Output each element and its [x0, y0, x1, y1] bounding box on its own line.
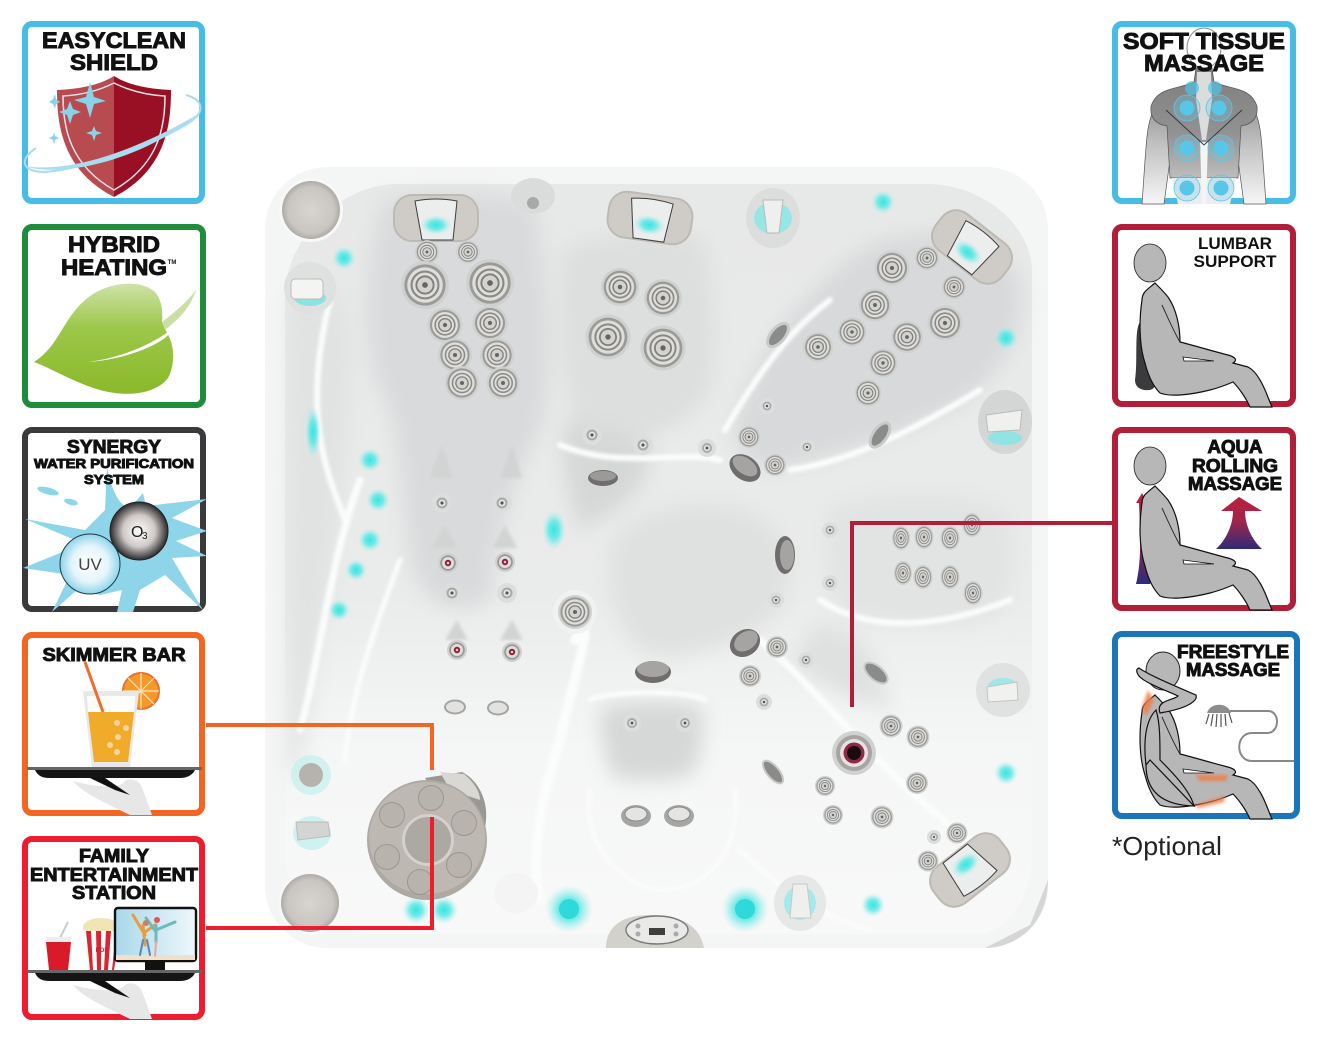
heading: Skimmer Bar: SKIMMER BAR: [42, 645, 186, 665]
panel: Skimmer Bar: [25, 635, 202, 815]
heading: Soft Tissue Massage: [1123, 28, 1285, 76]
icon: tablet with dancers: [115, 908, 196, 971]
panel: EasyClean Shield: [24, 24, 202, 201]
connector: family entertainment station: [206, 817, 432, 928]
jets: lower right seat: [724, 623, 968, 872]
heading: Family Entertainment Station: [30, 846, 198, 903]
icon: green leaf: [34, 284, 196, 394]
icon: shield with sparkles: [24, 76, 200, 197]
heading: Soft Tissue Massage: MASSAGE: [1144, 50, 1264, 76]
rolling massage jet: [832, 731, 876, 775]
heading: Lumbar Support: SUPPORT: [1194, 252, 1277, 271]
heading: Synergy: [34, 437, 194, 487]
icon: ozone bubble: [110, 502, 168, 560]
icon: droplets: [36, 485, 79, 507]
heading: Aqua Rolling Massage: AQUA: [1208, 437, 1262, 457]
heading: Aqua Rolling Massage: MASSAGE: [1188, 474, 1282, 494]
heading: Aqua Rolling Massage: ROLLING: [1192, 456, 1278, 476]
icon: orange slice: [123, 673, 159, 709]
heading: Family Entertainment Station: FAMILY: [79, 846, 149, 866]
illustration: muscular back with massage points: [1142, 28, 1266, 204]
heading: Aqua Rolling Massage: [1188, 437, 1282, 494]
icon: popcorn: POP: [96, 948, 108, 954]
panel: Family Entertainment Station: [25, 839, 202, 1019]
panel: Aqua Rolling Massage: [1115, 430, 1293, 610]
cup holder lights: [545, 885, 769, 933]
icon: figure reaching back with massage zones: [1137, 652, 1272, 819]
panel: Hybrid Heating: [25, 227, 203, 405]
icon: tray and hand: [27, 970, 202, 1019]
headrest pillows: [393, 188, 1021, 915]
icon: soda cup: [46, 922, 71, 970]
arrow: back rolling gradient: [1136, 493, 1154, 584]
cyan lights: [305, 190, 1018, 924]
tub shell: [265, 167, 1048, 948]
icon: UV bubble: UV: [78, 555, 102, 574]
icon: juice glass: [83, 662, 139, 767]
connector: skimmer bar: [206, 725, 432, 770]
jets: left lounge leg channels: [432, 493, 522, 714]
heading: Hybrid Heating: TM: [168, 260, 176, 266]
heading: Freestyle Massage: MASSAGE: [1186, 660, 1280, 680]
icon: popcorn: [83, 918, 121, 970]
connector: aqua rolling massage: [852, 523, 1112, 707]
heading: Synergy: SYSTEM: [84, 472, 144, 487]
rim right corner shading: [985, 880, 1048, 948]
heading: Hybrid Heating: HYBRID: [68, 232, 160, 257]
heading: EasyClean Shield: SHIELD: [70, 50, 158, 75]
panel: Lumbar Support: [1115, 227, 1293, 407]
tub interior shading: [288, 193, 1022, 781]
icon: tray and hand: [27, 767, 202, 815]
jets: centre footwell: [553, 398, 815, 683]
spa tub: [265, 167, 1048, 948]
heading: Synergy: WATER PURIFICATION: [34, 456, 194, 471]
panel: Soft Tissue Massage: [1115, 24, 1293, 204]
heading: Hybrid Heating: [61, 232, 176, 280]
heading: Synergy: SYNERGY: [67, 437, 161, 457]
waterfall and handrail fixtures: [284, 178, 1032, 931]
icon: water splash: [23, 467, 207, 612]
white sculpted highlights: [300, 300, 1010, 930]
heading: EasyClean Shield: EASYCLEAN: [42, 28, 186, 53]
icon: UV bubble: [60, 534, 120, 594]
heading: Family Entertainment Station: STATION: [72, 883, 156, 903]
heading: Freestyle Massage: FREESTYLE: [1177, 642, 1289, 662]
control panel: [606, 915, 704, 948]
heading: Lumbar Support: [1194, 234, 1277, 271]
arrow: upward gradient: [1216, 497, 1262, 549]
icon: ozone bubble: O: [131, 524, 143, 541]
heading: EasyClean Shield: [42, 28, 186, 75]
family entertainment station disc: [367, 772, 487, 900]
icon: lumbar cushion: [1135, 322, 1155, 390]
heading: Soft Tissue Massage: SOFT TISSUE: [1123, 28, 1285, 54]
heading: Family Entertainment Station: ENTERTAINMENT: [30, 865, 198, 885]
icon: ozone bubble: 3: [142, 531, 148, 542]
heading: Hybrid Heating: HEATING: [61, 255, 167, 280]
jets: top seats: [401, 240, 966, 450]
icon: seated figure: [1134, 244, 1272, 407]
panel: Freestyle Massage: [1115, 634, 1297, 819]
panel: Synergy water purification: [23, 430, 207, 612]
jets: bottom seat: [621, 714, 694, 827]
icon: seated figure: [1134, 447, 1272, 610]
heading: Lumbar Support: LUMBAR: [1198, 234, 1272, 253]
speakers: [278, 178, 343, 935]
note: optional: *Optional: [1112, 831, 1222, 861]
tub basin: [285, 184, 1032, 934]
jets: right lounger: [822, 513, 982, 605]
icon: massage wand and hose: [1206, 705, 1294, 761]
heading: Freestyle Massage: [1177, 642, 1289, 680]
leg channel wedges: [430, 445, 523, 640]
